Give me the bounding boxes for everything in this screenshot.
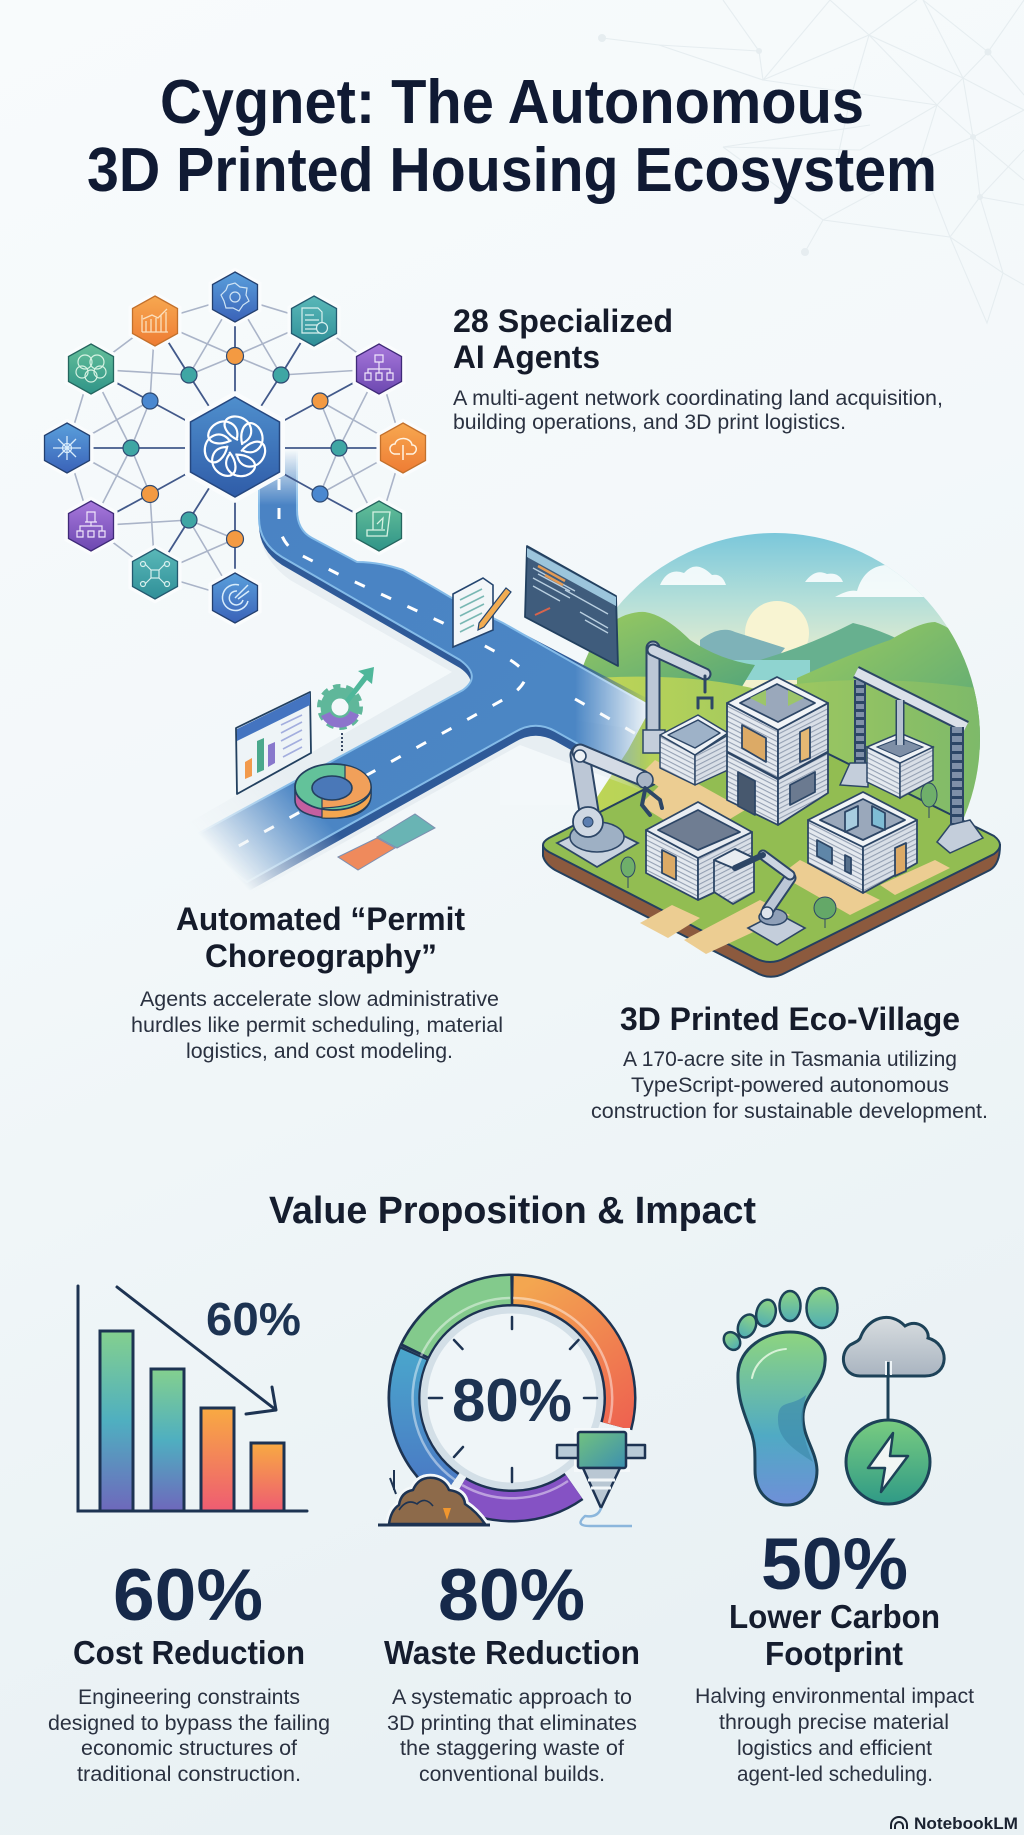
stat: lower carbon footprint: Lower Carbon [729,1598,940,1635]
road shadow [254,536,640,856]
panel: 28 specialized AI agents text: A multi-agent network coordinating land acquisition, [453,387,943,410]
background network pattern [598,0,1024,323]
icon: organic network agent [64,340,118,398]
icon: hub sensor agent [40,418,94,478]
title: 3D Printed Housing Ecosystem [87,136,937,205]
trees [621,783,937,928]
stat: waste reduction: Waste Reduction [384,1634,640,1671]
icon: material and cost cards [338,814,435,870]
icon: shield badge agent [208,268,262,326]
stat: cost reduction [48,1555,330,1786]
stat: waste reduction: conventional builds. [419,1763,605,1786]
stat: waste reduction: 80% [438,1555,585,1636]
bar chart: 60% cost reduction: 60% [206,1293,301,1345]
icon: gear with arrow [320,667,374,752]
icon: carbon footprint [720,1288,838,1505]
stat: lower carbon footprint: Footprint [765,1635,903,1672]
title: Cygnet: The Autonomous [160,68,864,137]
printed building: bottom right [808,792,917,893]
icon: permit document and pencil [453,578,511,647]
icon: target agent [208,568,262,628]
icon: central agent hub [185,391,285,503]
connection nodes [123,348,347,548]
stat: waste reduction: the staggering waste of [400,1737,624,1760]
stat: cost reduction: designed to bypass the failing [48,1712,330,1735]
panel: 28 specialized AI agents text: AI Agents [453,339,600,375]
stat: waste reduction: A systematic approach to [392,1686,632,1709]
printed building: back left [660,715,728,785]
panel: 28 specialized AI agents text: 28 Specialized [453,303,673,339]
stat: cost reduction: traditional construction. [77,1763,301,1786]
panel: 3D printed eco-village text [591,1001,988,1123]
printed building: two-storey tower [727,677,828,825]
icon: hierarchy agent [352,340,406,398]
panel: 3D printed eco-village text: TypeScript-powered autonomous [631,1074,949,1097]
icon: waste pile [378,1470,490,1525]
sand paths [640,760,950,954]
icon: organization chart agent [64,496,118,556]
panel: automated permit choreography text: logistics, and cost modeling. [186,1040,453,1063]
robot arm: bottom centre [735,855,805,945]
gantry printer [840,672,983,853]
icon: molecular network agent [128,544,182,604]
stat: lower carbon footprint [695,1524,974,1786]
panel: 28 specialized AI agents text: building operations, and 3D print logistics. [453,411,846,434]
stat: lower carbon footprint: through precise material [719,1711,949,1734]
stat: lower carbon footprint: 50% [761,1524,908,1605]
panel: automated permit choreography text: Agents accelerate slow administrative [140,988,499,1011]
stat: lower carbon footprint: logistics and efficient [737,1737,932,1760]
NotebookLM watermark: NotebookLM [914,1814,1018,1833]
panel: automated permit choreography text: hurdles like permit scheduling, material [131,1014,503,1037]
panel: automated permit choreography text [131,901,503,1063]
stat: cost reduction: 60% [113,1555,263,1636]
icon: growth chart agent [128,292,182,350]
icon: cloud and lightning [843,1317,944,1504]
road [190,450,660,892]
stat: waste reduction: 3D printing that eliminates [387,1712,637,1735]
3D printed eco-village island [543,648,1000,977]
island base [543,845,1000,977]
icon: document check agent [287,292,341,350]
stat: cost reduction: economic structures of [81,1737,297,1760]
icon: dashboard window [236,692,311,794]
stat: cost reduction: Cost Reduction [73,1634,305,1671]
icon: blueprint agent [352,496,406,556]
panel: 3D printed eco-village text: A 170-acre site in Tasmania utilizing [623,1048,957,1071]
icon: isometric donut chart [295,764,371,818]
stat: waste reduction [384,1555,640,1786]
panel: 3D printed eco-village text: 3D Printed Eco-Village [620,1001,960,1037]
icon: print nozzle [557,1428,645,1526]
stat: lower carbon footprint: agent-led scheduling. [737,1763,933,1786]
agent network diagram [40,268,430,628]
stat: lower carbon footprint: Halving environmental impact [695,1685,974,1708]
bar chart: 60% cost reduction [78,1286,307,1511]
title [87,68,937,205]
donut gauge: 80% waste reduction [378,1290,645,1526]
white ground beneath fading road [500,620,652,805]
panel: 28 specialized AI agents text [453,303,943,434]
donut gauge: 80% waste reduction: 80% [452,1367,572,1434]
stat: cost reduction: Engineering constraints [78,1686,300,1709]
section heading: value proposition: Value Proposition & Impact [269,1190,756,1232]
panel: automated permit choreography text: Choreography” [205,938,437,974]
robot arm tower [643,648,712,753]
panel: 3D printed eco-village text: construction for sustainable development. [591,1100,988,1123]
robot arm: large left [557,750,662,867]
panel: automated permit choreography text: Automated “Permit [176,901,465,937]
code screen panel [525,546,618,666]
village sky and hills backdrop [583,533,980,818]
icon: cloud upload agent [376,418,430,478]
printed building: bottom left layered [646,802,754,904]
